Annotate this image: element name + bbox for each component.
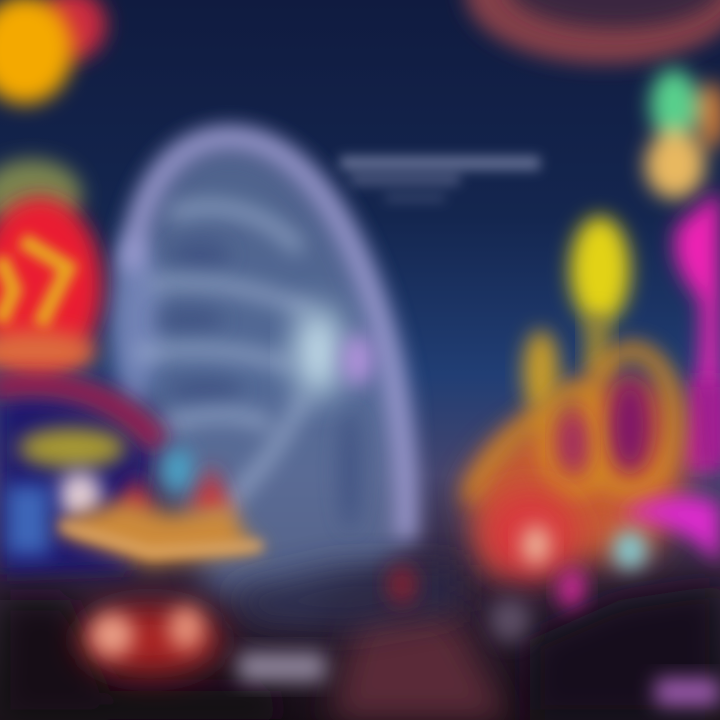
- sign top green: [0, 159, 82, 231]
- wheel body: [125, 140, 405, 610]
- orange marquee: [60, 500, 265, 565]
- red crown points: [115, 465, 232, 520]
- right neon cluster: [465, 216, 720, 612]
- wheel rim: [130, 138, 406, 540]
- top-left balloon sign: [0, 0, 106, 104]
- crowd and ground: [0, 565, 720, 720]
- left yellow tip: [523, 330, 559, 414]
- pink lamp: [559, 568, 585, 612]
- wheel hub glow: [294, 306, 342, 398]
- stall base red: [80, 606, 220, 674]
- stall lamp left: [90, 613, 134, 657]
- purple loop interior: [610, 379, 650, 471]
- left arch and booth: [0, 384, 265, 575]
- neon loops: [470, 350, 674, 500]
- wheel spokes: [135, 207, 310, 520]
- blue panel: [6, 485, 50, 555]
- cyan light: [163, 448, 193, 492]
- sign glyph: [0, 240, 68, 325]
- sign rim: [465, 0, 720, 64]
- white lamp: [522, 525, 550, 565]
- yellow sign: [18, 428, 126, 468]
- wheel dark gaps: [156, 239, 362, 530]
- sign lower orange: [0, 330, 97, 374]
- top-right round sign: [465, 0, 720, 64]
- red figure: [387, 565, 417, 605]
- left red sign: [0, 159, 102, 374]
- purple sign bottom right: [655, 678, 720, 706]
- cyan lamp: [613, 530, 647, 570]
- wheel left blur band: [111, 235, 159, 405]
- sign body: [0, 197, 102, 373]
- purple lower column: [690, 380, 720, 470]
- white sign bottom: [238, 652, 326, 682]
- stall lamp right: [168, 606, 204, 650]
- booth interior: [0, 397, 150, 575]
- right dark crowd: [530, 585, 720, 720]
- marquee bright strip: [60, 525, 262, 552]
- yellow light: [645, 131, 705, 199]
- red portion: [38, 0, 106, 60]
- faint caption smear: [340, 156, 540, 201]
- right magenta neon column: [674, 190, 720, 470]
- magenta streak: [620, 496, 720, 565]
- ferris wheel: [111, 138, 406, 610]
- green light: [650, 69, 698, 141]
- yellow flame: [570, 216, 630, 324]
- magenta loop interior: [559, 412, 587, 472]
- white globe: [58, 471, 102, 519]
- sign centre: [507, 0, 720, 28]
- central path: [330, 610, 510, 720]
- right upper coloured lights: [645, 69, 720, 199]
- left dark crowd: [0, 600, 280, 720]
- crowd silhouettes centre: [230, 565, 460, 630]
- wheel hub pink glow: [342, 334, 374, 386]
- yellow portion: [0, 0, 73, 104]
- arch: [0, 384, 160, 445]
- orange light: [698, 81, 720, 149]
- orange neon mass: [465, 376, 685, 570]
- grey figure: [490, 598, 530, 642]
- flame stem: [586, 315, 608, 375]
- red lower area: [482, 490, 578, 580]
